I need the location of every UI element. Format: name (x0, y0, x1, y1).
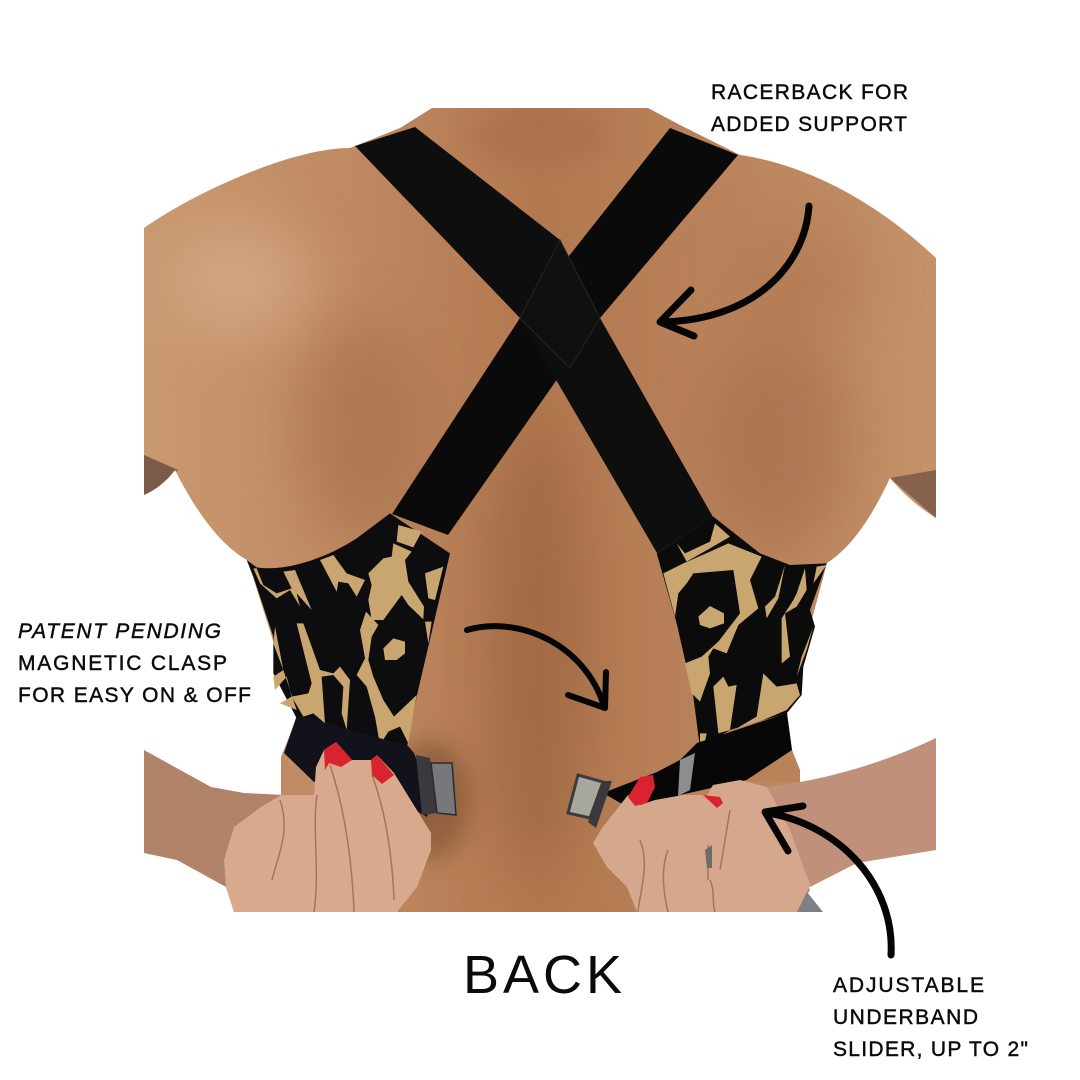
right metal clasp (568, 753, 695, 828)
callout: racerback (711, 81, 908, 136)
strap: upper-left to lower-right (355, 127, 713, 553)
left forearm (144, 750, 300, 887)
title: back: BACK (463, 945, 622, 1005)
left hand (224, 742, 431, 912)
arrow: underband slider (765, 806, 891, 955)
right hand (593, 775, 810, 912)
callout: underband slider: ADJUSTABLE (833, 974, 984, 997)
callout: patent pending clasp: PATENT PENDING (18, 620, 221, 643)
left red nails (324, 742, 394, 784)
left metal clasp (416, 755, 456, 815)
callout: underband slider (833, 974, 1028, 1061)
callout: underband slider: UNDERBAND (833, 1006, 978, 1029)
right underband (603, 713, 792, 820)
callout: underband slider: SLIDER, UP TO 2" (833, 1038, 1028, 1061)
callout: patent pending clasp: FOR EASY ON & OFF (18, 684, 251, 707)
left underband (284, 715, 432, 817)
arrow: racerback (660, 206, 809, 336)
strap crossing (520, 240, 600, 368)
waist skin, left (281, 757, 314, 795)
arrow: magnetic clasp (467, 626, 606, 708)
waist skin, right (745, 750, 800, 782)
right leopard panel (657, 517, 827, 748)
photo: back view of the bra (144, 105, 936, 912)
jeans at lower right (797, 892, 823, 912)
body (144, 105, 936, 912)
right red nails (628, 775, 723, 808)
callout: patent pending clasp: MAGNETIC CLASP (18, 652, 227, 675)
strap: upper-right to lower-left (392, 128, 738, 535)
left leopard panel (247, 513, 450, 748)
right forearm (767, 738, 936, 887)
callout: patent pending clasp (18, 620, 251, 707)
callout: racerback: RACERBACK FOR (711, 81, 908, 104)
callout: racerback: ADDED SUPPORT (711, 113, 907, 136)
